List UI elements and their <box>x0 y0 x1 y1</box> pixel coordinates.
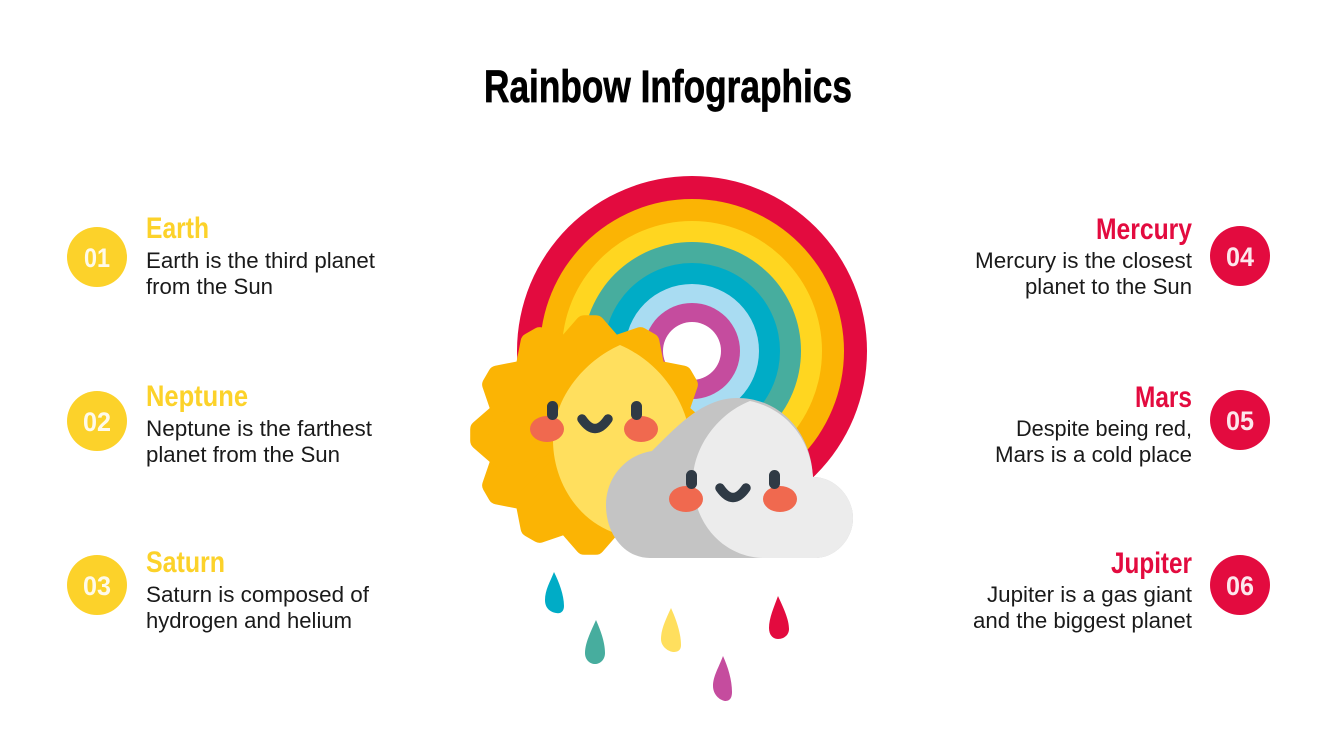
item 03: Saturn: hydrogen and helium <box>146 608 352 633</box>
item 01: Earth: Earth is the third planet <box>146 248 375 273</box>
item 03: Saturn <box>67 546 370 633</box>
item 03: Saturn: Saturn <box>146 546 225 579</box>
item 05: Mars: Despite being red, <box>1016 416 1192 441</box>
item 04: Mercury <box>975 213 1270 299</box>
item 01: Earth: 01 <box>84 243 110 273</box>
icon: magenta raindrop <box>713 656 732 701</box>
illustration: rainbow <box>517 176 867 526</box>
item 06: Jupiter: 06 <box>1226 571 1254 601</box>
item 06: Jupiter: Jupiter is a gas giant <box>987 582 1192 607</box>
item 04: Mercury: Mercury <box>1096 213 1192 246</box>
item 06: Jupiter: and the biggest planet <box>973 608 1192 633</box>
icon: cyan raindrop <box>545 572 564 613</box>
item 02: Neptune <box>67 380 372 467</box>
item 02: Neptune: 02 <box>83 407 111 437</box>
item 03: Saturn: Saturn is composed of <box>146 582 370 607</box>
illustration: smiling sun <box>479 324 701 546</box>
icon: red raindrop <box>769 596 789 639</box>
item 03: Saturn: 03 <box>83 571 111 601</box>
item 02: Neptune: Neptune is the farthest <box>146 416 372 441</box>
item 05: Mars: Mars <box>1135 381 1192 414</box>
icon: yellow raindrop <box>661 608 681 652</box>
item 04: Mercury: Mercury is the closest <box>975 248 1192 273</box>
item 05: Mars: Mars is a cold place <box>995 442 1192 467</box>
title: Rainbow Infographics <box>484 61 852 112</box>
item 04: Mercury: 04 <box>1226 242 1254 272</box>
illustration: smiling cloud <box>606 398 853 558</box>
item 01: Earth: from the Sun <box>146 274 273 299</box>
icon: teal raindrop <box>585 620 605 664</box>
item 05: Mars <box>995 381 1270 467</box>
item 06: Jupiter: Jupiter <box>1111 547 1192 580</box>
item 05: Mars: 05 <box>1226 406 1254 436</box>
item 06: Jupiter <box>973 547 1270 633</box>
item 01: Earth <box>67 212 375 299</box>
item 02: Neptune: planet from the Sun <box>146 442 340 467</box>
item 01: Earth: Earth <box>146 212 209 245</box>
item 02: Neptune: Neptune <box>146 380 248 413</box>
item 04: Mercury: planet to the Sun <box>1025 274 1192 299</box>
